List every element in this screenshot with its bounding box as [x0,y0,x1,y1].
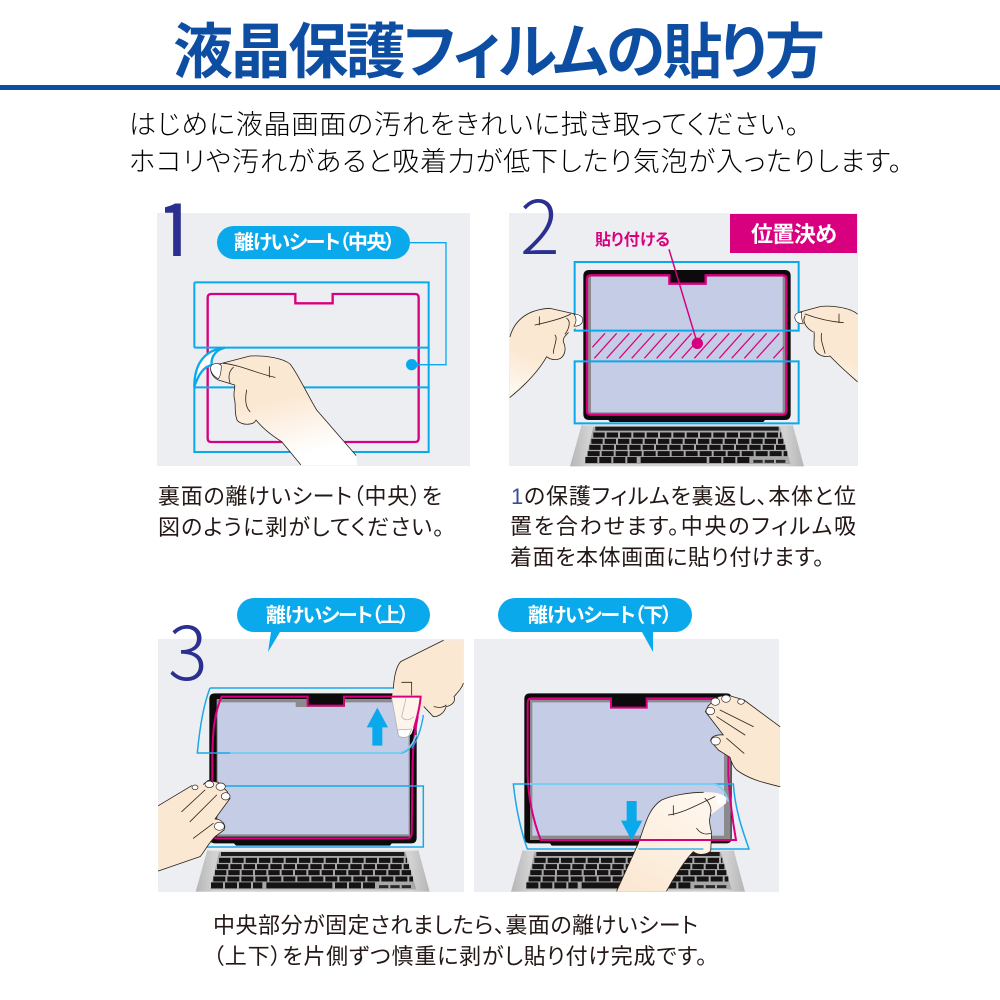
step 3 caption [213,913,707,969]
step 1 caption: 図のように剥がしてください。 [158,515,444,540]
blue film outlines [575,262,799,423]
label: apply here: 貼り付ける [595,230,670,249]
numeral 2: 2 [520,169,560,276]
badge: positioning: 位置決め [751,222,837,247]
leader dot [692,338,703,349]
step 3 caption: （上下）を片側ずつ慎重に剥がし貼り付け完成です。 [213,944,707,969]
label: bottom liner: 離けいシート（下） [528,604,672,627]
adhesive hatch [592,333,784,358]
step 3 caption: 中央部分が固定されましたら、裏面の離けいシート [213,913,698,938]
label: bottom liner [498,598,692,652]
leader line [669,249,697,343]
laptop lid [209,693,417,846]
leader dot [406,359,417,370]
icon: left hand [510,308,583,397]
arrow down [621,801,642,841]
film outline blue [194,282,429,452]
step 2 caption [510,484,856,570]
laptop keyboard [511,850,745,892]
intro text [129,110,902,177]
step 2 caption: 1の保護フィルムを裏返し、本体と位 [511,484,856,509]
icon: lower hand [158,780,230,871]
step 2 caption: 着面を本体画面に貼り付けます。 [510,545,824,570]
laptop keyboard [570,425,804,466]
screen [217,699,410,837]
magenta film outline [212,697,421,838]
step 1 caption [158,484,444,540]
label: center liner [217,226,410,259]
panel: step 3 bottom liner [474,598,780,892]
laptop lid [524,693,732,846]
icon: right hand [705,695,780,787]
panel: step 3 top liner [158,595,464,892]
magenta film outline [528,698,736,840]
laptop keyboard [196,850,430,892]
label: center liner: 離けいシート（中央） [234,231,395,254]
icon: hand peeling [211,356,357,465]
laptop lid [583,270,791,422]
title rule [0,85,1000,90]
panel: step 2 [509,169,858,466]
title: 液晶保護フィルムの貼り方 [173,19,825,86]
label: top liner [237,598,430,652]
blue film: upper lifted [197,688,415,753]
panel: step 1 [157,204,470,466]
intro text: はじめに液晶画面の汚れをきれいに拭き取ってください。 [129,110,799,140]
screen [587,275,787,415]
label: top liner: 離けいシート（上） [266,604,409,627]
blue film: lower lifted [513,784,749,849]
icon: peeling hand [617,792,735,891]
badge: positioning [730,214,857,253]
screen [530,700,731,840]
icon: right hand [795,306,857,382]
numeral 1: 1 [152,169,199,290]
numeral 3: 3 [168,595,208,702]
intro text: ホコリや汚れがあると吸着力が低下したり気泡が入ったりします。 [129,147,902,177]
camera notch [611,697,647,708]
leader line [410,243,446,365]
icon: upper hand [392,640,463,748]
camera notch [308,695,344,706]
arrow up [367,708,388,746]
step 2 caption: 置を合わせます。中央のフィルム吸 [510,514,856,539]
magenta film outline [587,275,786,415]
step 1 caption: 裏面の離けいシート（中央）を [158,484,442,509]
peeled corner [194,348,224,387]
magenta film outline [208,294,419,442]
